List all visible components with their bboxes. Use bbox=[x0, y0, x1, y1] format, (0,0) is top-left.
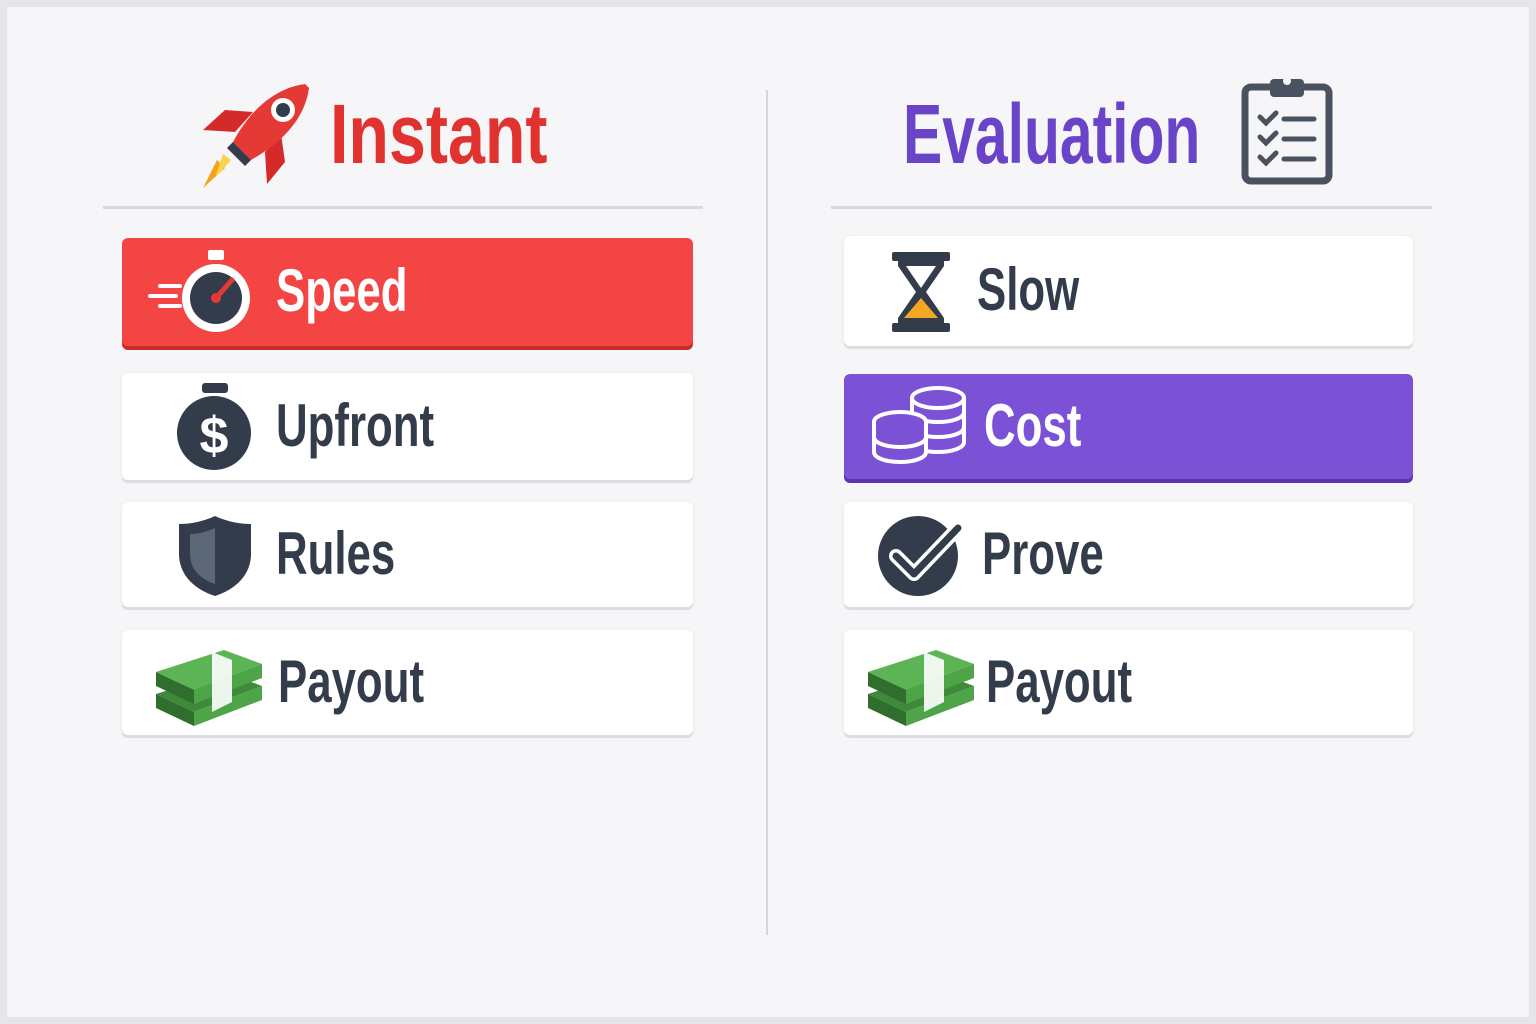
label: Upfront bbox=[276, 391, 434, 458]
label: Payout bbox=[278, 647, 424, 714]
icon: rocket bbox=[203, 84, 309, 188]
title text: Evaluation bbox=[903, 87, 1200, 181]
icon: money bag bbox=[177, 383, 251, 470]
header: Evaluation bbox=[903, 79, 1332, 184]
card: Speed bbox=[122, 238, 693, 346]
card: Payout left bbox=[122, 630, 693, 735]
label: Slow bbox=[977, 256, 1079, 323]
icon: stopwatch bbox=[148, 250, 250, 332]
icon: clipboard bbox=[1242, 79, 1332, 184]
label: Rules bbox=[276, 519, 395, 586]
label: Payout bbox=[986, 647, 1132, 714]
icon: money bag: $ bbox=[200, 407, 229, 465]
label: Cost bbox=[984, 391, 1081, 458]
card: Slow bbox=[844, 236, 1413, 346]
icon: hourglass bbox=[892, 252, 950, 332]
card: Cost bbox=[844, 374, 1413, 479]
card: Prove bbox=[844, 502, 1413, 607]
card: Rules bbox=[122, 502, 693, 607]
icon: check circle bbox=[878, 516, 962, 596]
header: Instant bbox=[203, 84, 548, 188]
icon: coins bbox=[872, 386, 966, 464]
label: Speed bbox=[276, 257, 407, 324]
card: Payout right bbox=[844, 630, 1413, 735]
label: Prove bbox=[982, 519, 1104, 586]
icon: cash stack bbox=[868, 650, 974, 726]
icon: shield bbox=[179, 516, 251, 596]
title text: Instant bbox=[330, 87, 548, 181]
icon: cash stack bbox=[156, 650, 262, 726]
card: Upfront bbox=[122, 373, 693, 480]
